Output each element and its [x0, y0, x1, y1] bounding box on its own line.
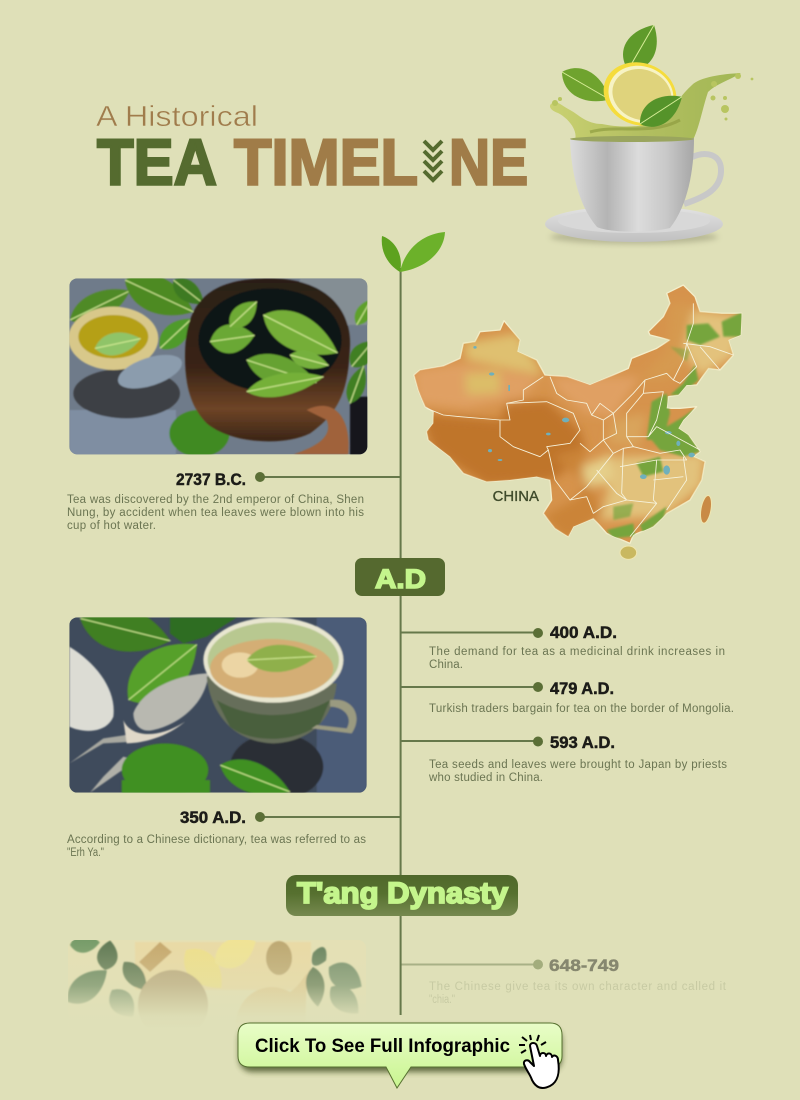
cup handle	[684, 154, 721, 204]
saucer	[545, 206, 723, 242]
entry: 400 A.D.: China.	[429, 659, 463, 671]
entry: 648-749 (faded)	[400, 956, 619, 975]
cup body	[570, 138, 694, 232]
button shadow	[239, 1027, 562, 1072]
entry: 400 A.D.: The demand for tea as a medicinal drink increases in	[429, 646, 725, 658]
date: 2737 B.C.	[176, 470, 246, 489]
entry: 479 A.D.	[400, 679, 734, 715]
era label: A.D	[355, 558, 445, 596]
era label: A.D: A.D	[375, 564, 426, 594]
title word: TEA: TEA	[97, 126, 217, 198]
call-to-action button	[238, 1023, 562, 1088]
leaf: front	[633, 86, 689, 135]
button body with pointer	[238, 1023, 562, 1088]
Taiwan	[699, 495, 713, 524]
entry: 350 A.D.: "Erh Ya."	[67, 847, 104, 859]
entry: 350 A.D.	[67, 808, 400, 859]
entry: 479 A.D.: 479 A.D.	[550, 679, 614, 698]
title word: NE: NE	[449, 126, 528, 198]
entry: 400 A.D.	[400, 623, 725, 671]
entry: 648-749 (faded): 648-749	[549, 956, 619, 975]
entry: 350 A.D.: 350 A.D.	[180, 808, 246, 827]
title	[96, 101, 528, 198]
description: cup of hot water.	[67, 520, 156, 532]
photo: silver cup of tea	[69, 617, 367, 793]
entry: 350 A.D.: According to a Chinese dictionary, tea was referred to as	[67, 834, 366, 846]
leaf: top	[615, 17, 667, 78]
splash droplets	[552, 73, 753, 120]
leaf: back left	[555, 60, 617, 112]
icon: clicking hand	[519, 1035, 559, 1088]
title line: A Historical: A Historical	[96, 101, 258, 133]
entry: 400 A.D.: 400 A.D.	[550, 623, 617, 642]
illustration: tea cup with splash	[545, 17, 753, 244]
entry: 479 A.D.: Turkish traders bargain for tea on the border of Mongolia.	[429, 703, 734, 715]
Hainan	[620, 546, 637, 559]
entry: 593 A.D.	[400, 733, 727, 784]
entry: 593 A.D.: who studied in China.	[428, 772, 543, 784]
title word: TIMEL: TIMEL	[234, 126, 418, 198]
lemon slice	[595, 52, 685, 136]
faded description: "chia."	[429, 994, 455, 1006]
description: Tea was discovered by the 2nd emperor of China, Shen	[67, 494, 364, 506]
faded description: The Chinese give tea its own character and called it	[429, 981, 727, 993]
map label: CHINA	[493, 489, 539, 505]
photo: faded tea still life	[68, 940, 362, 1016]
splash	[550, 73, 741, 140]
photo: bowl of tea leaves	[69, 278, 368, 454]
saucer shadow	[550, 230, 718, 244]
entry: 2737 B.C.	[67, 470, 400, 532]
icon: sprout	[382, 232, 445, 272]
entry: 593 A.D.: 593 A.D.	[550, 733, 615, 752]
button label: Click To See Full Infographic	[255, 1036, 510, 1057]
era label: T'ang Dynasty: T'ang Dynasty	[297, 877, 508, 910]
connector	[262, 476, 400, 478]
map: China	[413, 285, 743, 559]
entry: 593 A.D.: Tea seeds and leaves were brought to Japan by priests	[429, 759, 727, 771]
icon: chevrons as letter I	[424, 141, 442, 180]
province borders	[427, 303, 733, 537]
timeline spine	[400, 268, 402, 1015]
description: Nung, by accident when tea leaves were blown into his	[67, 507, 364, 519]
